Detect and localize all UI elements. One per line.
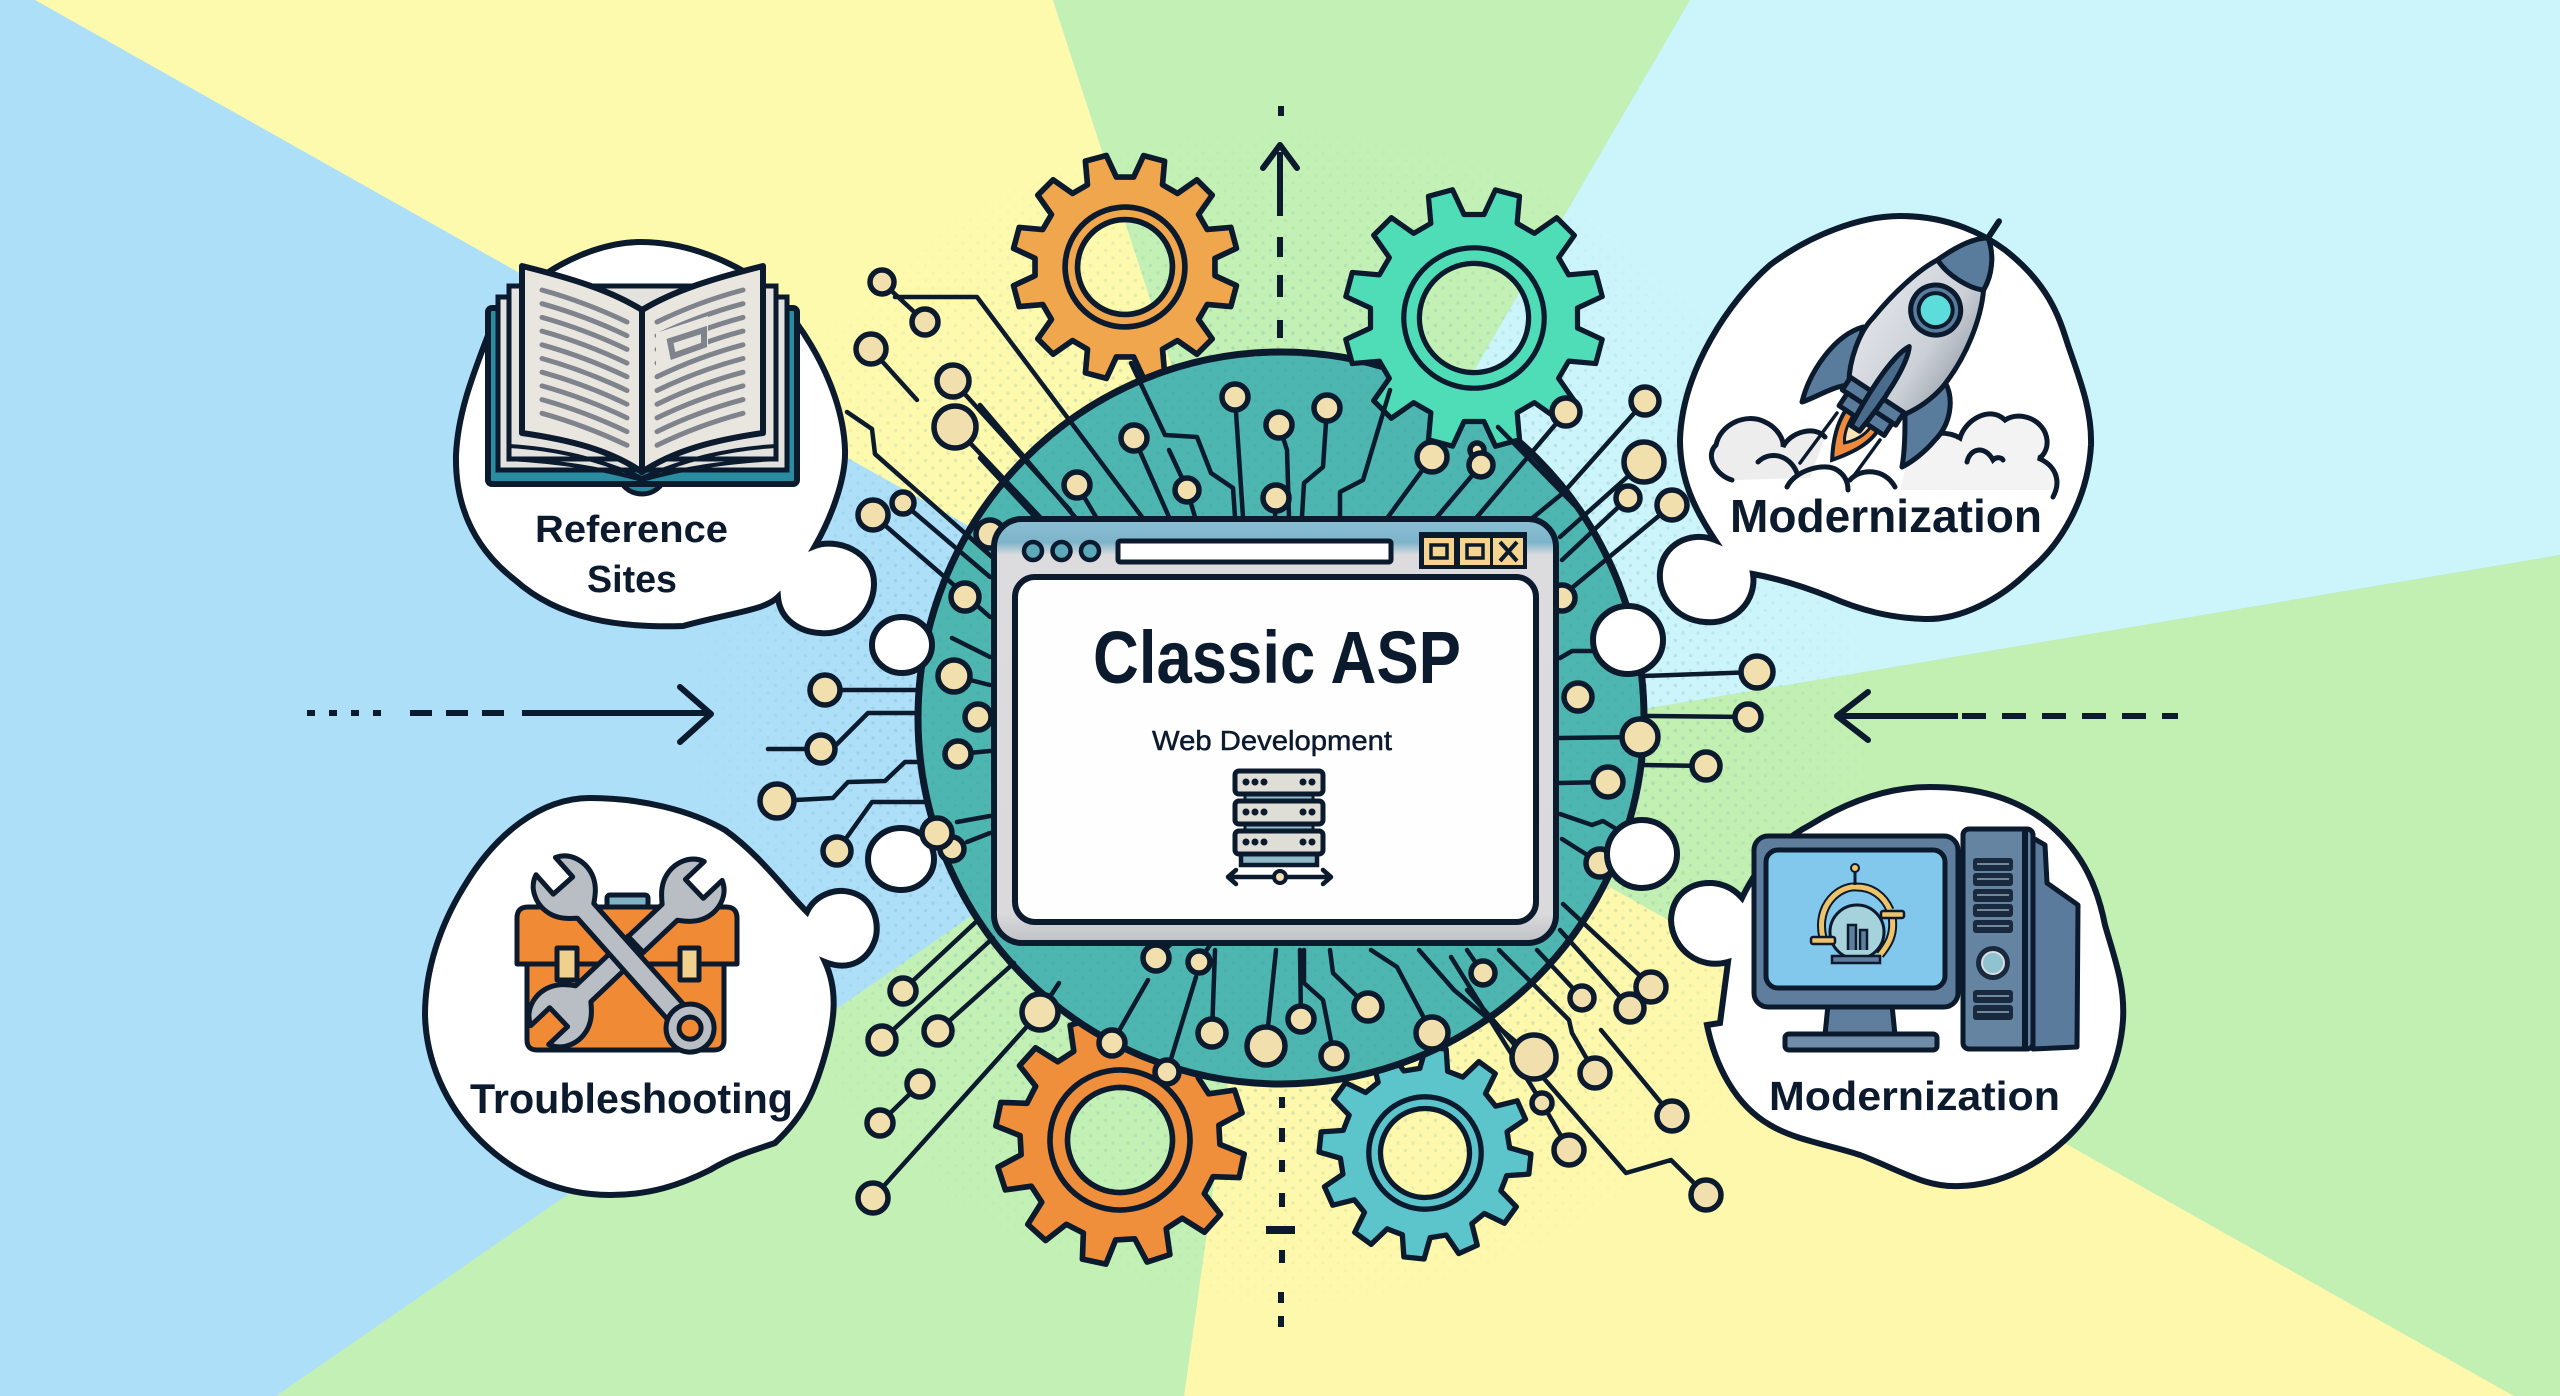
gear: blue bottom (1309, 1037, 1541, 1269)
label line 2: Sites (587, 559, 677, 601)
subtitle: Web Development (1152, 725, 1392, 756)
panel: Modernization computer (1671, 787, 2123, 1186)
label: Modernization (1769, 1073, 2060, 1119)
circuit traces: left (760, 617, 991, 890)
window control buttons (1419, 532, 1527, 569)
speech bubble (456, 242, 874, 633)
circuit traces: bottom (858, 904, 1721, 1213)
arrow: right dashed arrow pointing left (1837, 692, 2178, 740)
circuit traces: upper left (847, 270, 1070, 617)
icon: clouds (1711, 414, 2057, 497)
speech bubble (1671, 787, 2123, 1186)
central browser window (994, 519, 1556, 943)
icon: rocket (1795, 192, 2036, 489)
title: Classic ASP (1093, 616, 1461, 699)
content panel (1015, 577, 1536, 922)
gear: orange top (987, 129, 1263, 405)
address bar (1118, 541, 1391, 562)
label: Reference (535, 509, 728, 551)
circuit traces: right (1530, 387, 1773, 888)
icon: desktop computer (1754, 829, 2078, 1050)
disc halftone (921, 355, 1641, 1081)
central teal disc (918, 352, 1644, 1084)
panel: Reference Sites (456, 242, 874, 633)
arrow: top dashed arrow pointing up (1263, 106, 1297, 338)
speech bubble (1660, 216, 2091, 622)
arrow: bottom dashed line (1266, 1097, 1295, 1327)
gear: orange bottom (972, 992, 1268, 1288)
panel: Troubleshooting (425, 798, 877, 1195)
arrow: left dashed arrow pointing right (307, 687, 711, 742)
icon: server rack (1228, 771, 1331, 884)
window dots (1024, 542, 1099, 560)
circuit traces: top (882, 282, 1586, 517)
window chrome (994, 519, 1556, 943)
icon: open book (488, 266, 797, 494)
icon: toolbox with wrenches (517, 846, 737, 1066)
label: Modernization (1730, 490, 2042, 542)
speech bubble (425, 798, 877, 1195)
halftone dot halo (766, 190, 1812, 1264)
label: Troubleshooting (470, 1075, 793, 1122)
panel: Modernization rocket (1660, 192, 2091, 622)
gear: teal top (1316, 160, 1632, 476)
